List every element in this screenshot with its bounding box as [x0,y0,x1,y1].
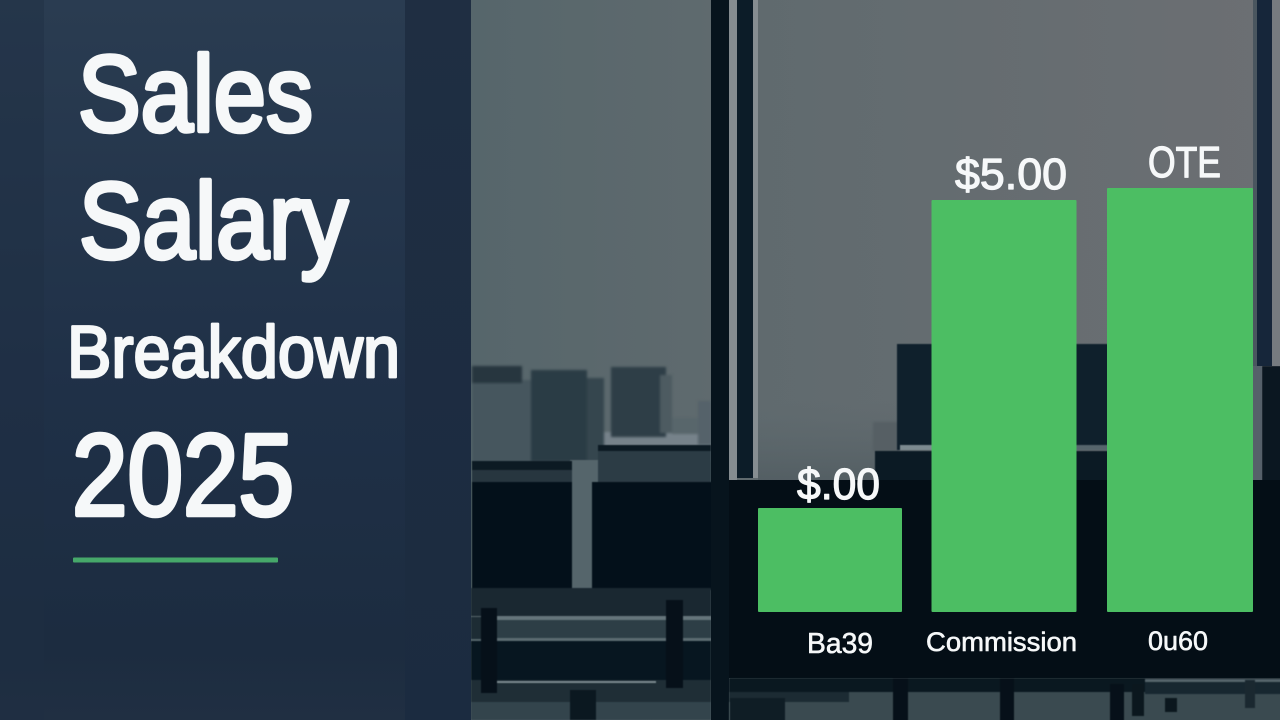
background: office window scene [471,0,1280,720]
heading: 2025: 2025 [72,410,294,540]
panel: title sidebar [0,0,471,720]
bar chart [758,138,1253,660]
bar: Commission: $5.00 [955,150,1067,199]
bar: OTE: OTE [1148,138,1221,187]
heading: Salary: Salary [79,160,348,281]
floor and desk legs [729,678,1280,720]
bar: Commission [926,150,1077,657]
bar: Base [758,460,902,660]
bar: OTE: 0u60 [1148,626,1208,656]
far side desks and chairs [471,445,717,720]
skyline buildings [472,366,899,462]
window mullions [711,0,1280,720]
bar: Commission: Commission [926,627,1077,657]
heading: Sales: Sales [78,33,313,154]
bar: Base: Ba39 [807,628,873,660]
bar: OTE [1107,138,1253,656]
monitors behind chart [875,344,1280,483]
heading: Breakdown: Breakdown [67,312,400,393]
accent underline [73,558,278,562]
dark chart backdrop [729,480,1280,678]
bar: Base: $.00 [797,460,880,509]
